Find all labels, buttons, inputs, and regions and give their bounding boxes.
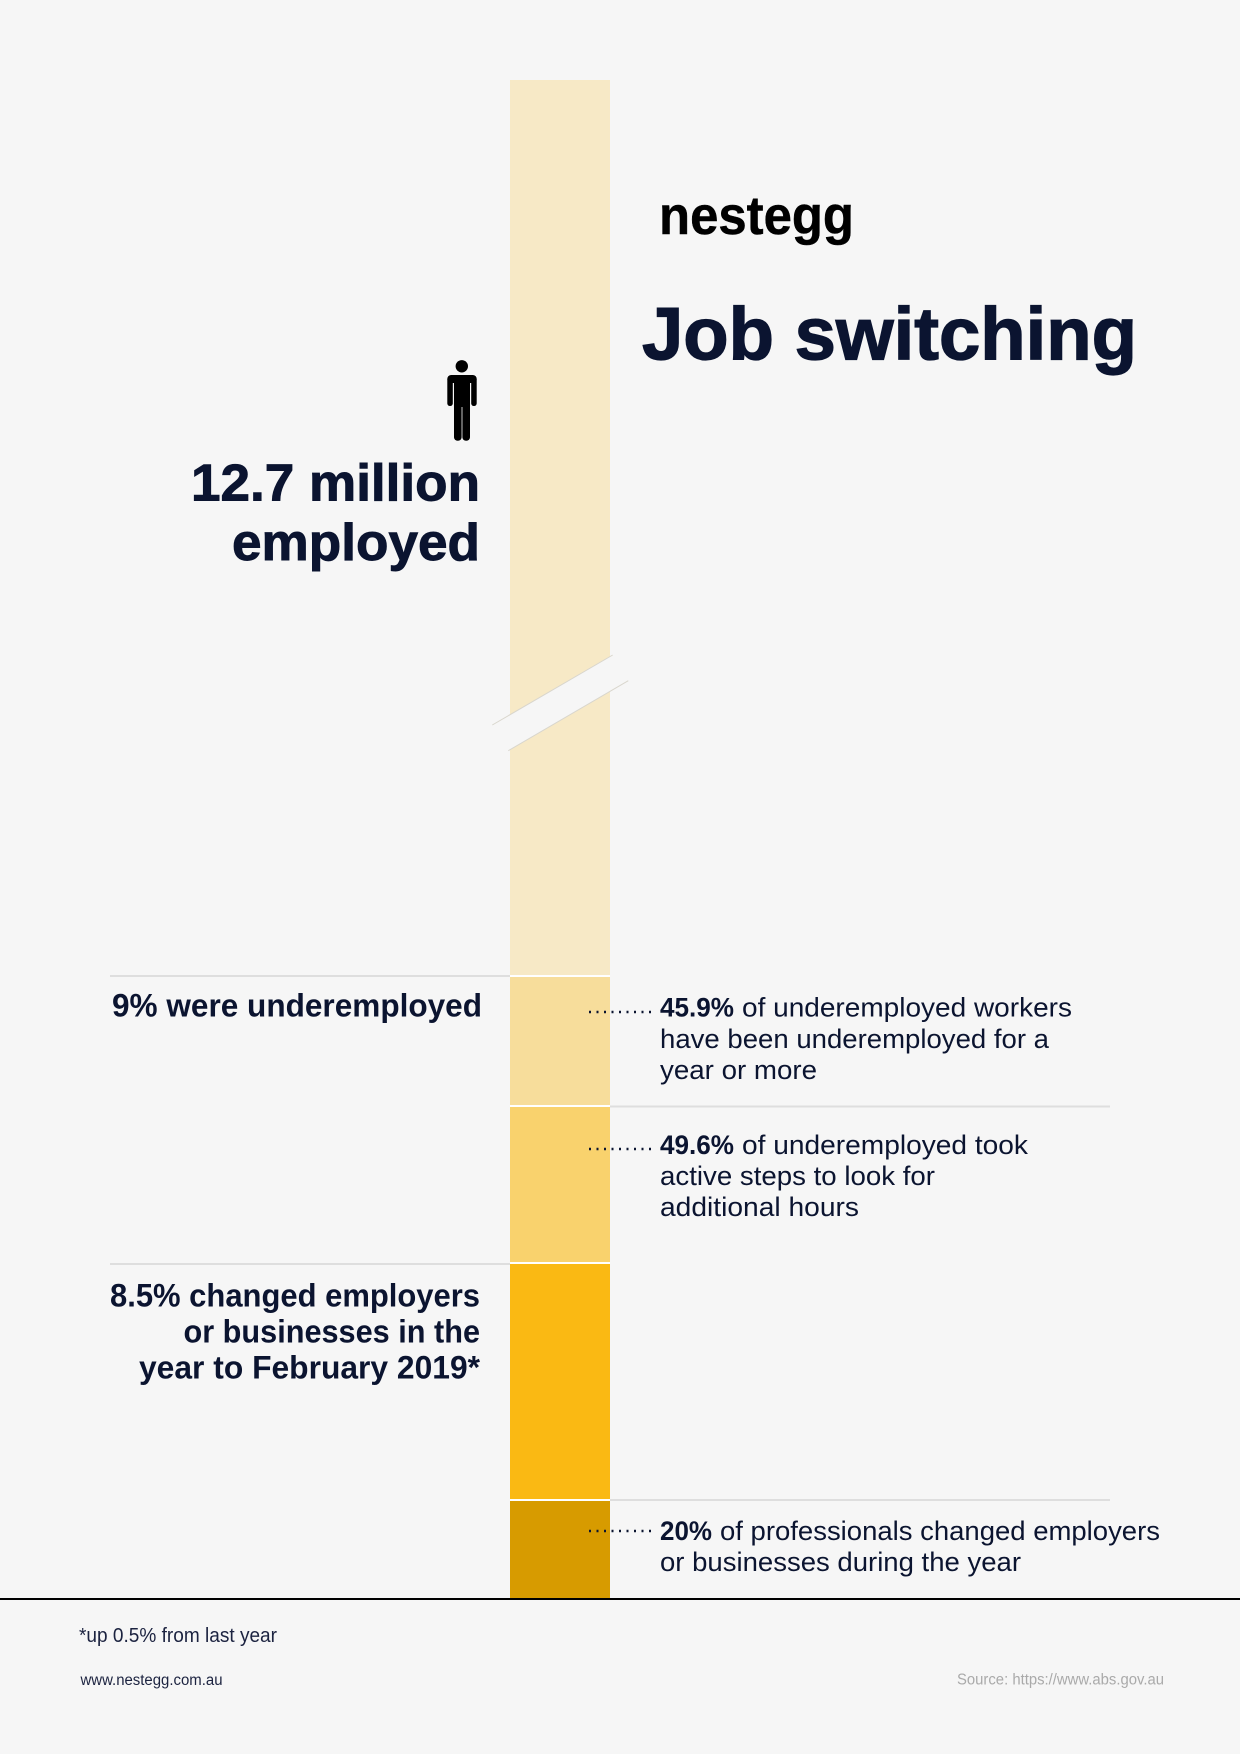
segment: all employed <box>510 80 610 975</box>
stacked column chart <box>492 80 628 1598</box>
callout: 49.6% <box>589 1130 1029 1222</box>
segment: professionals changed employers <box>510 1501 610 1598</box>
callout: 45.9%: of underemployed workers <box>742 992 1072 1022</box>
icon: person <box>447 360 477 441</box>
callout: 49.6%: active steps to look for <box>660 1161 935 1191</box>
heading: 12.7 million employed: 12.7 million <box>191 454 480 512</box>
callout: 45.9%: have been underemployed for a <box>660 1024 1050 1054</box>
callout: 45.9%: 45.9% <box>660 992 734 1022</box>
segment: changed employers <box>510 1264 610 1499</box>
callout: 20%: of professionals changed employers <box>720 1516 1160 1546</box>
column break mark <box>492 655 628 751</box>
dotted leader <box>589 1148 652 1150</box>
callout: 49.6%: additional hours <box>660 1192 859 1222</box>
heading: 12.7 million employed <box>191 454 480 572</box>
label: 8.5% changed employers: year to February 2019* <box>139 1350 481 1386</box>
callout: 45.9%: year or more <box>660 1055 817 1085</box>
callout: 45.9% <box>589 992 1072 1085</box>
website: www.nestegg.com.au <box>80 1672 222 1689</box>
callout: 49.6%: of underemployed took <box>742 1130 1029 1160</box>
callout: 49.6%: 49.6% <box>660 1130 734 1160</box>
label: 8.5% changed employers: 8.5% changed employers <box>110 1278 480 1314</box>
dotted leader <box>589 1530 652 1532</box>
segment: underemployed for a year or more <box>510 977 610 1105</box>
dotted leader <box>589 1011 652 1013</box>
label: 9% were underemployed: 9% were underemployed <box>112 988 482 1024</box>
callout: 20%: 20% <box>660 1516 712 1546</box>
callout: 20% <box>589 1516 1160 1577</box>
label: 8.5% changed employers: or businesses in the <box>184 1314 480 1350</box>
title: Job switching <box>642 292 1137 376</box>
heading: 12.7 million employed: employed <box>232 514 480 572</box>
logo: nestegg: nestegg <box>659 186 854 246</box>
segment: looked for additional hours <box>510 1107 610 1262</box>
source: Source: https://www.abs.gov.au <box>957 1672 1164 1688</box>
label: 8.5% changed employers <box>110 1278 481 1386</box>
callout: 20%: or businesses during the year <box>660 1547 1021 1577</box>
footnote: *up 0.5% from last year <box>79 1625 277 1647</box>
